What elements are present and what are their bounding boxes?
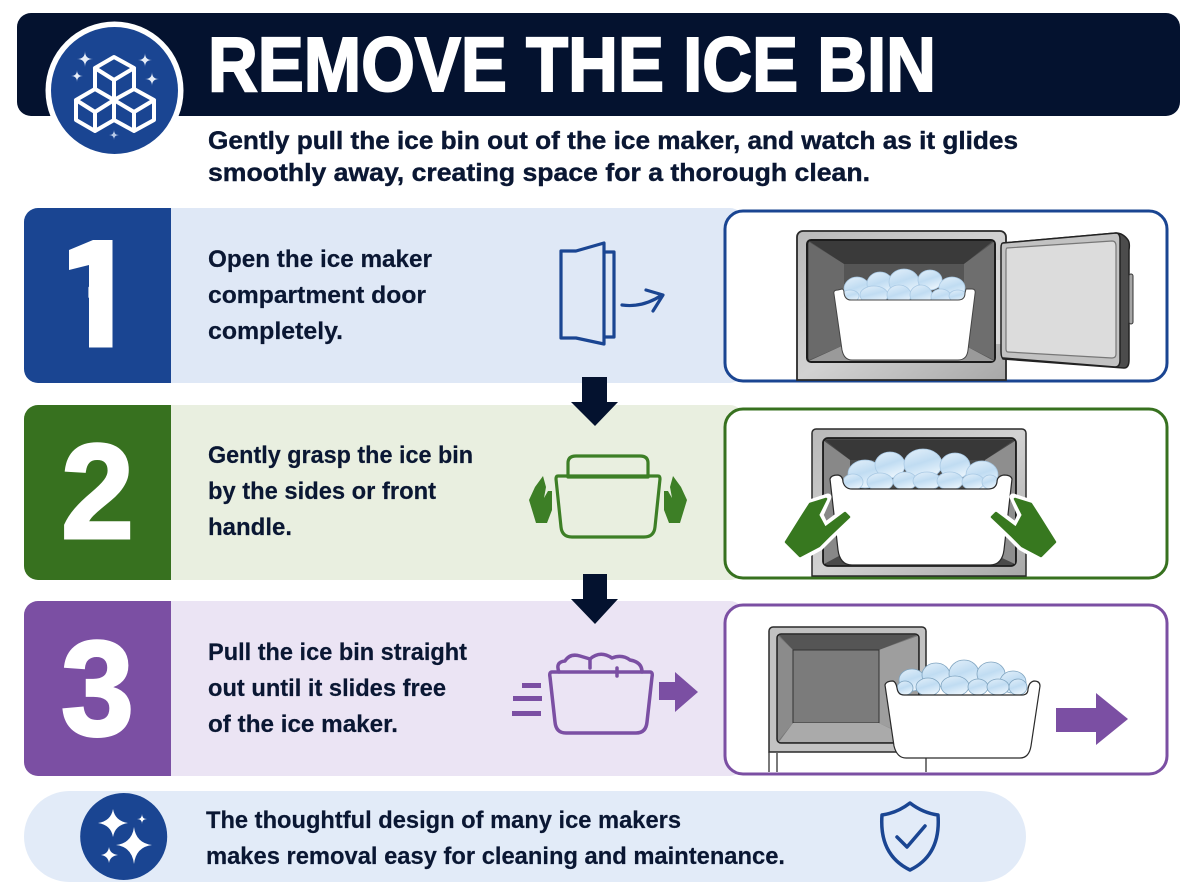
- step 3 text: Pull the ice bin straight: [208, 639, 467, 666]
- ice: [843, 449, 998, 491]
- step 2 text: handle.: [208, 514, 292, 541]
- header banner: [17, 13, 1180, 116]
- arrow: pull direction: [1056, 693, 1128, 745]
- footer text: makes removal easy for cleaning and maintenance.: [206, 843, 785, 870]
- step number 2: 2: [61, 416, 134, 567]
- step 1 text: compartment door: [208, 282, 426, 309]
- step 3 text: [208, 639, 467, 738]
- hinge and door: [996, 260, 1004, 344]
- icon: ice cubes badge: [46, 22, 184, 160]
- icon: hands grasping bin: [529, 456, 687, 537]
- step 3 text: of the ice maker.: [208, 711, 398, 738]
- ice: [841, 269, 967, 305]
- ice bin: [885, 681, 1040, 758]
- illustration card: hands grasping bin: [725, 409, 1167, 578]
- panel: step 2: [24, 405, 1167, 580]
- step 1 text: Open the ice maker: [208, 246, 432, 273]
- subtitle: smoothly away, creating space for a thorough clean.: [208, 159, 870, 187]
- icon: sparkles: [80, 793, 167, 880]
- panel: step 3: [24, 601, 1167, 776]
- ice bin: [830, 475, 1012, 565]
- panel: footer note: [24, 791, 1026, 882]
- icon: opening door: [561, 243, 663, 344]
- footer text: The thoughtful design of many ice makers: [206, 807, 681, 834]
- subtitle: Gently pull the ice bin out of the ice maker, and watch as it glides: [208, 127, 1018, 155]
- footer text: [206, 807, 785, 870]
- step 3 text: out until it slides free: [208, 675, 446, 702]
- illustration card: door open: [725, 211, 1167, 381]
- ice bin: [834, 289, 975, 360]
- title: REMOVE THE ICE BIN: [208, 22, 936, 108]
- machine body: [812, 429, 1026, 576]
- step number 3: 3: [61, 613, 134, 764]
- icon: bin sliding out: [512, 654, 698, 733]
- illustration card: bin pulled out: [725, 605, 1167, 774]
- step 2 text: [208, 442, 473, 541]
- machine body: [769, 627, 926, 752]
- arrow: step 1 to 2: [571, 377, 618, 426]
- step 1 text: completely.: [208, 318, 343, 345]
- step number 1: 1: [84, 255, 116, 367]
- panel: step 1: [24, 208, 1167, 383]
- step 2 text: by the sides or front: [208, 478, 436, 505]
- machine body: [797, 231, 1006, 380]
- hands: [784, 497, 1057, 558]
- step 1 text: [208, 246, 432, 345]
- ice: [897, 660, 1027, 696]
- step number 1: [69, 235, 130, 367]
- subtitle: [208, 127, 1018, 187]
- arrow: step 2 to 3: [571, 574, 618, 624]
- icon: shield check: [882, 803, 938, 870]
- step 2 text: Gently grasp the ice bin: [208, 442, 473, 469]
